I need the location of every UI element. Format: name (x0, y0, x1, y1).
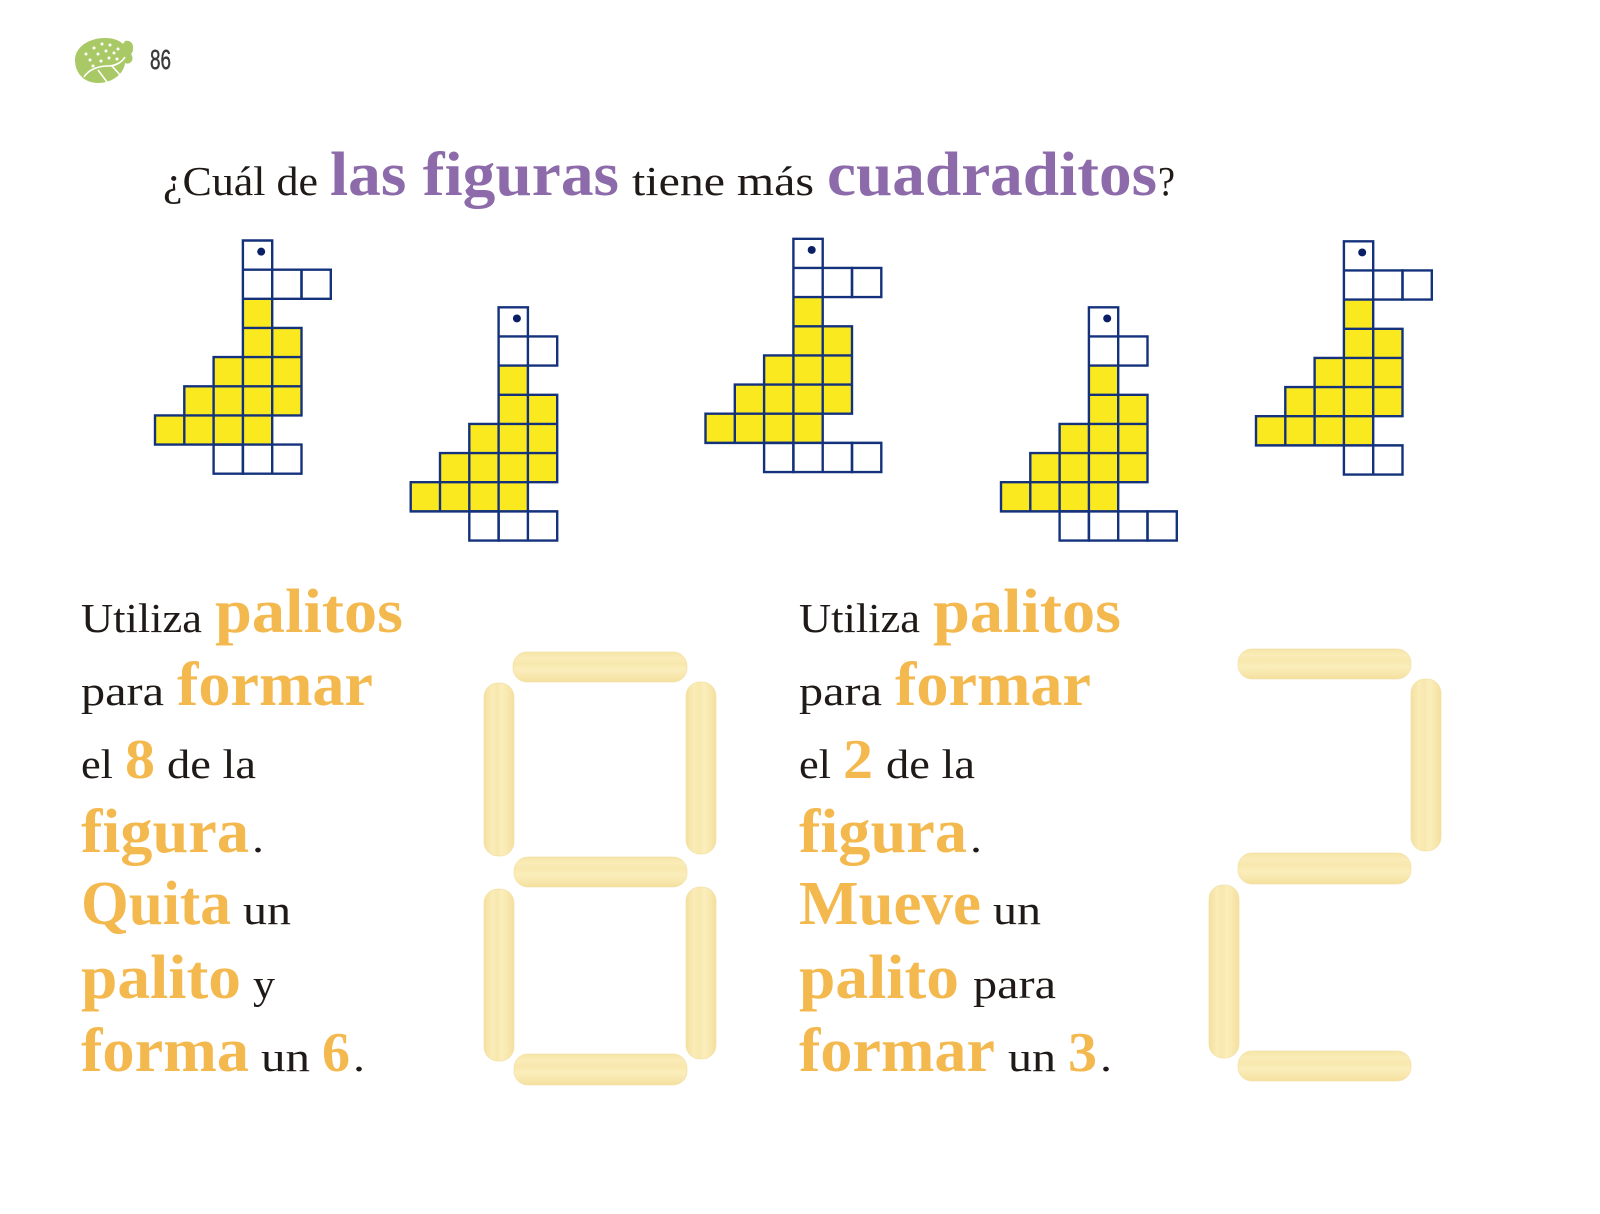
title: cuadraditos (827, 141, 1157, 209)
figure 4 (1001, 307, 1177, 541)
text block: right instructions: para (973, 961, 1056, 1007)
title (163, 141, 1175, 209)
text block: right instructions: . (1100, 1034, 1112, 1080)
text block: right instructions: Utiliza (799, 595, 920, 641)
text block: left instructions: un (243, 887, 291, 933)
figure 5 (1256, 241, 1432, 475)
text block: left instructions: 8 (125, 729, 155, 791)
sticks: digit 8 (484, 652, 716, 1085)
text block: right instructions: un (993, 887, 1041, 933)
text block: left instructions: 6 (322, 1022, 350, 1084)
text block: right instructions: palito (799, 944, 959, 1012)
text block: right instructions: de la (886, 741, 975, 787)
text block: right instructions: . (970, 815, 982, 861)
text block: left instructions: palitos (215, 578, 403, 646)
text block: left instructions: Quita (81, 870, 231, 938)
text block: right instructions: 2 (843, 729, 873, 791)
figure 1 (155, 240, 331, 474)
page number: 86 (150, 44, 171, 75)
text block: left instructions: . (353, 1034, 365, 1080)
text block: left instructions: forma (81, 1017, 249, 1085)
text block: left instructions: formar (177, 651, 373, 719)
text block: left instructions: . (252, 815, 264, 861)
text block: left instructions: un (261, 1034, 310, 1080)
title: las figuras (330, 141, 619, 209)
text block: left instructions: palito (81, 944, 241, 1012)
text block: right instructions: 3 (1068, 1022, 1097, 1084)
text block: left instructions: para (81, 668, 164, 714)
figure 3 (706, 239, 881, 472)
title: ? (1158, 158, 1175, 204)
title: tiene más (632, 158, 814, 204)
text block: right instructions: figura (799, 798, 967, 866)
text block: left instructions: Utiliza (81, 595, 202, 641)
text block: left instructions: y (253, 961, 276, 1007)
text block: left instructions: figura (81, 798, 249, 866)
text block: right instructions: palitos (933, 578, 1121, 646)
figure 2 (411, 307, 557, 541)
text block: right instructions: un (1008, 1034, 1056, 1080)
title: ¿Cuál de (163, 158, 318, 204)
sticks: digit 2 (1209, 649, 1441, 1081)
text block: right instructions: formar (799, 1017, 995, 1085)
text block: left instructions: el (81, 741, 113, 787)
text block: left instructions: de la (167, 741, 256, 787)
text block: right instructions (799, 578, 1121, 1085)
icon: armadillo (75, 38, 133, 83)
text block: right instructions: para (799, 668, 882, 714)
text block: left instructions (81, 578, 403, 1085)
text block: right instructions: formar (895, 651, 1091, 719)
text block: right instructions: Mueve (799, 870, 981, 938)
text block: right instructions: el (799, 741, 831, 787)
